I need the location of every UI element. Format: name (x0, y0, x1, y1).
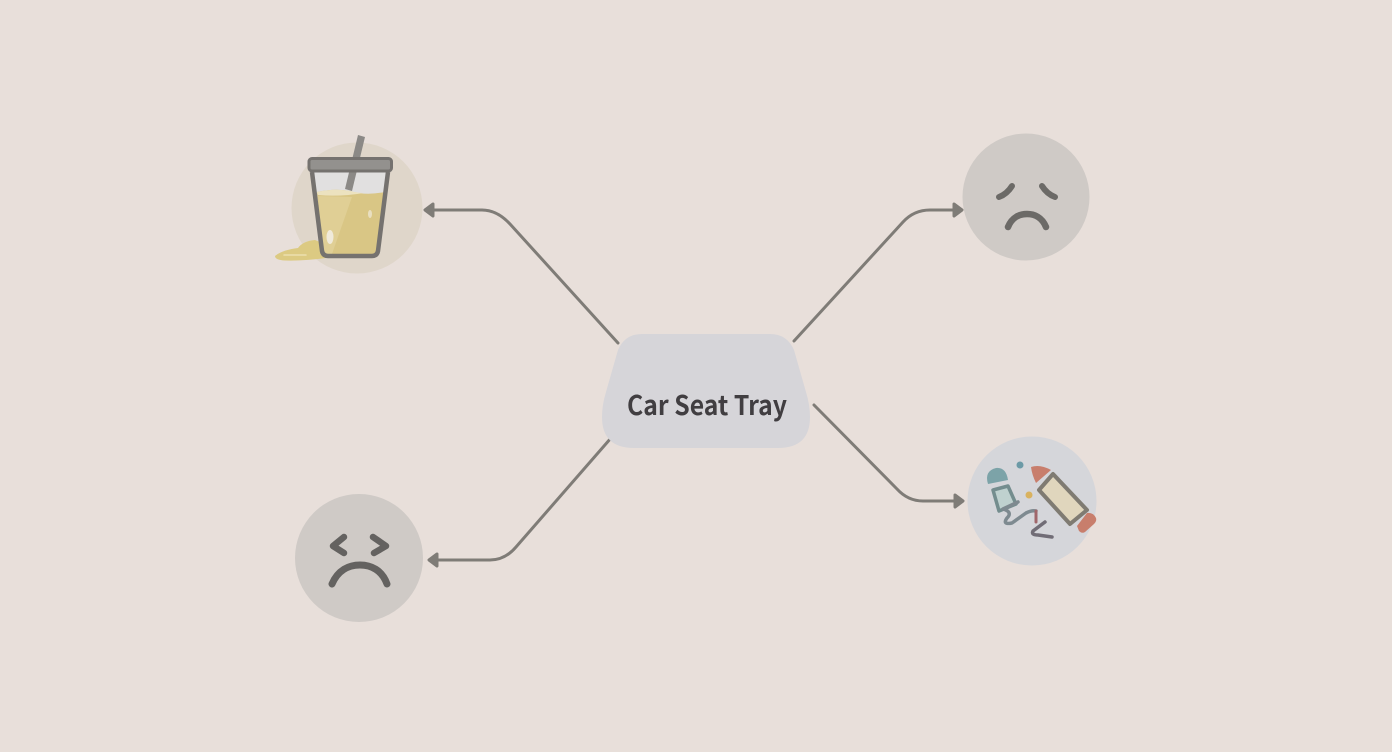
icon: spilled drink (275, 135, 422, 274)
icon: sad face (962, 134, 1090, 260)
drink liquid (317, 190, 385, 254)
arrow: to spilled drink (425, 204, 618, 343)
marker body (993, 486, 1016, 511)
icon: crayon mess (968, 436, 1096, 566)
dots (1016, 462, 1024, 468)
scribble (1003, 502, 1036, 523)
arrow: to frustrated face (429, 438, 611, 566)
arrow: to sad face (794, 204, 962, 341)
cup lid (309, 158, 392, 171)
arrow: to crayon mess (814, 405, 963, 507)
frown (332, 565, 387, 584)
cup glass (312, 172, 388, 254)
crayon end (1077, 513, 1096, 533)
squinting eyes (333, 537, 386, 553)
crayon tip (1031, 466, 1051, 483)
icon: frustrated face (295, 494, 423, 622)
frown (1008, 214, 1046, 227)
heading: tray label: Car Seat Tray (627, 384, 787, 423)
marker cap (987, 468, 1008, 484)
cup outline (312, 172, 388, 256)
spill puddle (275, 240, 326, 261)
eyebrows (999, 186, 1055, 197)
crayon body (1039, 474, 1087, 524)
straw (345, 135, 365, 191)
central tray panel (602, 334, 810, 448)
